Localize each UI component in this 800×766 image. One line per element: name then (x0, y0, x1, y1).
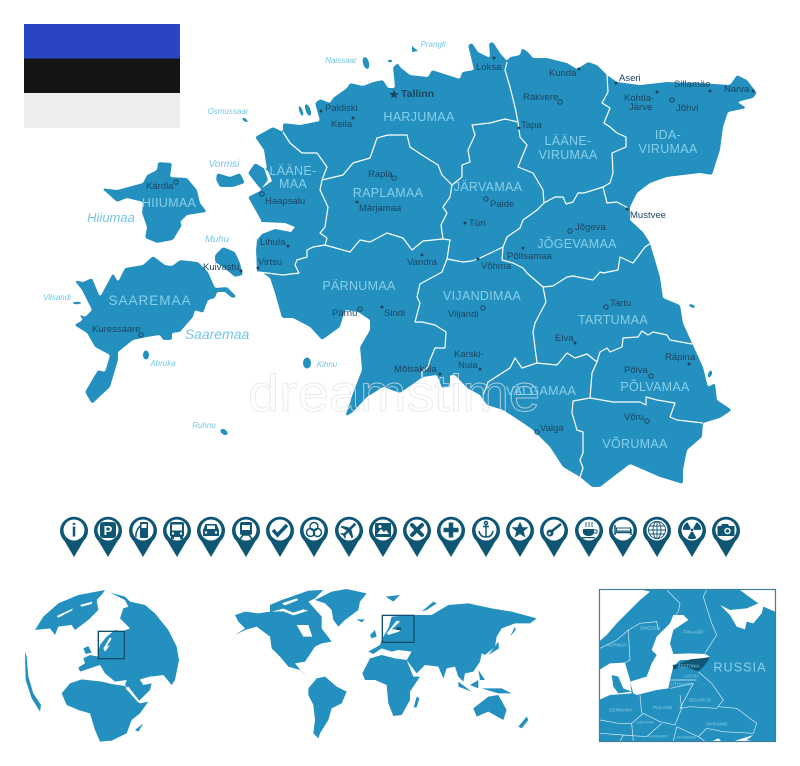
county names: JÄRVAMAA (454, 180, 523, 194)
county names: VIRUMAA (538, 148, 598, 162)
island names: Vilsandi (43, 293, 71, 302)
county names: JÕGEVAMAA (537, 236, 617, 251)
country borders (600, 590, 757, 741)
county names: SAAREMAA (108, 293, 192, 308)
mainland (248, 42, 757, 487)
globe locator (25, 590, 179, 742)
pin: info (60, 517, 88, 557)
county names: IDA- (655, 128, 681, 142)
pin: bus (163, 517, 191, 557)
pin: fuel (129, 517, 157, 557)
city labels: Sindi (384, 308, 405, 319)
Lihula and Haapsalu inlets (250, 168, 295, 240)
county names: PÕLVAMAA (620, 379, 690, 394)
county names: HIIUMAA (142, 196, 196, 210)
country names: ROMANIA (677, 735, 696, 740)
country names (606, 625, 767, 740)
country names: CZECHIA (636, 719, 654, 724)
country names: POLAND (653, 705, 673, 710)
island names (43, 40, 446, 430)
city labels: Märjamaa (359, 203, 402, 214)
city labels: Põlva (624, 365, 648, 376)
pin: picture (369, 517, 397, 557)
county names: VÕRUMAA (602, 436, 668, 451)
island names: Hiiumaa (87, 210, 135, 225)
county names: RAPLAMAA (353, 186, 424, 200)
city labels: Elva (555, 333, 574, 344)
city labels: Paldiski (325, 103, 358, 114)
county names: TARTUMAA (578, 313, 648, 327)
pin: key (540, 517, 568, 557)
North America (235, 590, 332, 677)
country names: ESTONIA (681, 663, 700, 668)
pin: coffee (575, 517, 603, 557)
city labels: Viljandi (448, 309, 478, 320)
Hudson Bay, Arctic channels and Baltic (272, 598, 400, 637)
city labels: Karski- (454, 349, 484, 360)
country names: FINLAND (683, 629, 704, 634)
city labels: Rakvere (523, 92, 558, 103)
country names: HUNGARY (648, 733, 669, 738)
city labels: Kuressaare (92, 324, 141, 335)
Australia and other islands (473, 695, 507, 720)
pin: parking: P (104, 523, 113, 538)
main map of Estonia (43, 40, 757, 487)
city labels: Räpina (665, 352, 696, 363)
county names: LÄÄNE- (545, 134, 591, 148)
pin: globe (643, 517, 671, 557)
pin: car (197, 517, 225, 557)
Denmark (612, 675, 632, 693)
county names: VIRUMAA (638, 142, 698, 156)
city labels: Järve (629, 102, 652, 113)
country names: LITHUANIA (670, 682, 693, 687)
island names: Ruhnu (192, 421, 216, 430)
city labels: Pärnu (332, 308, 357, 319)
city labels: Põltsamaa (507, 251, 553, 262)
city labels: Paide (490, 199, 514, 210)
pin: bed (609, 517, 637, 557)
pin: check (266, 517, 294, 557)
Black Sea (712, 735, 753, 741)
city labels: Jõgeva (575, 222, 606, 233)
Norwegian Sea (599, 590, 650, 642)
county names: MAA (279, 177, 307, 191)
pin: biohazard (300, 517, 328, 557)
Muhu island (215, 247, 243, 277)
county names: HARJUMAA (383, 110, 455, 124)
White Sea (720, 590, 775, 629)
country names: NORWAY (606, 643, 627, 648)
country names: BELARUS (689, 697, 711, 702)
city labels: Võru (624, 412, 644, 423)
island names: Kihnu (317, 360, 338, 369)
city labels: Vandra (407, 257, 438, 268)
country names: UKRAINE (706, 722, 728, 728)
city labels: Tartu (610, 298, 631, 309)
islands (73, 46, 713, 436)
watermark: dreamstime (248, 365, 540, 423)
island names: Naissaar (325, 56, 357, 65)
city labels: Mustvee (630, 210, 666, 221)
county borders (258, 62, 703, 477)
city labels: Aseri (619, 73, 641, 84)
arctic channels and seas (57, 602, 152, 703)
county names: VALGAMAA (506, 384, 576, 398)
city labels: Tallinn (401, 88, 434, 100)
city labels (92, 62, 750, 434)
North Sea (599, 663, 632, 700)
island names: Osmussaar (208, 107, 249, 116)
row of map pin icons (60, 503, 740, 571)
pin: parking (94, 517, 122, 557)
Estonia highlight (673, 657, 710, 672)
city labels: Jõhvi (676, 103, 698, 114)
regional inset map (599, 589, 776, 742)
country names: GERMANY (609, 707, 632, 712)
city labels: Kuivastu (203, 262, 239, 273)
city labels: Virtsu (258, 257, 282, 268)
county names: LÄÄNE- (270, 164, 316, 178)
city labels: Loksa (476, 62, 502, 73)
flag of Estonia (24, 24, 180, 128)
country names: LATVIA (684, 674, 699, 679)
pin: star (506, 517, 534, 557)
Eurasia (368, 603, 537, 682)
city labels: Narva (724, 84, 750, 95)
small islands (143, 350, 149, 360)
pin: cross (403, 517, 431, 557)
pin: radiation (678, 517, 706, 557)
county names: PÄRNUMAA (322, 279, 396, 293)
locator box (98, 631, 124, 659)
city labels: Keila (331, 119, 353, 130)
Baltic Sea (630, 615, 710, 695)
island names: Vormsi (209, 159, 240, 170)
city labels: Haapsalu (265, 196, 305, 207)
pin: airplane (315, 503, 383, 571)
Saaremaa island (74, 256, 237, 404)
county names (108, 110, 698, 451)
country names: RUSSIA (713, 660, 767, 674)
island names: Abruka (149, 359, 176, 368)
city labels: Lihula (260, 237, 286, 248)
world map (235, 589, 537, 738)
Vormsi island (216, 173, 245, 187)
city labels: Rapla (368, 169, 394, 180)
city labels: Sillamäe (674, 79, 710, 90)
city labels: Võhma (481, 261, 512, 272)
city labels: Kunda (549, 68, 577, 79)
city labels: Kohtla- (624, 93, 654, 104)
pin: train (232, 517, 260, 557)
city labels: Türi (469, 218, 485, 229)
island names: Prangli (421, 40, 446, 49)
Greenland (315, 589, 367, 627)
pin: anchor (472, 517, 500, 557)
South America (308, 677, 347, 738)
city labels: Tapa (521, 120, 542, 131)
city markers (139, 56, 755, 434)
city labels: Valga (540, 423, 564, 434)
Hiiumaa island (101, 162, 207, 243)
city labels: Nuia (458, 360, 478, 371)
county names: VIJANDIMAA (443, 289, 521, 303)
pin: plus (437, 517, 465, 557)
city labels: Mõlsaküla (394, 364, 437, 375)
island names: Muhu (205, 234, 230, 245)
pin: info: i (71, 520, 77, 540)
island names: Saaremaa (185, 326, 250, 342)
city labels: Kärdla (146, 181, 174, 192)
locator box (382, 615, 414, 642)
Africa (362, 655, 420, 716)
country names: SWEDEN (640, 625, 660, 630)
pin: camera (712, 517, 740, 557)
Estonia marker (397, 627, 401, 630)
